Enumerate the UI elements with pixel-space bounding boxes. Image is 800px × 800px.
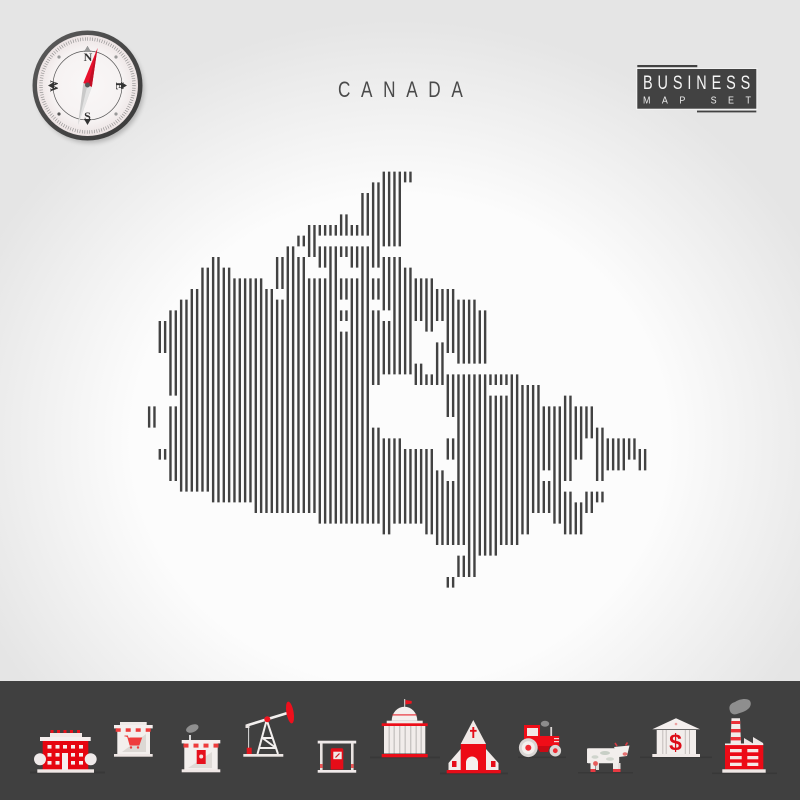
icon: compass: W (47, 80, 61, 92)
icon: coffee shop (182, 723, 220, 772)
icon: compass (32, 30, 144, 143)
icon: shop with cart (114, 722, 153, 757)
icon: bank: $ (669, 730, 682, 756)
icon: cow (578, 742, 633, 774)
icon: capitol building (370, 699, 440, 758)
badge: business map set (636, 65, 758, 112)
title: CANADA (338, 78, 464, 103)
icon: oil pump (243, 701, 295, 757)
icon: hotel (30, 730, 105, 774)
badge: business map set: MAP SET (643, 95, 751, 107)
icon: church (440, 720, 508, 774)
icon: compass: S (84, 109, 91, 123)
icon: gas station (318, 741, 356, 773)
badge: business map set: BUSINESS (643, 71, 750, 94)
map: Canada vertical stripes (149, 172, 645, 588)
icon: factory (712, 699, 777, 774)
footer band (0, 681, 800, 800)
icon: tractor (518, 721, 566, 758)
icon: compass: E (113, 82, 127, 90)
icon: bank (640, 718, 712, 758)
icon: compass: N (84, 50, 93, 64)
